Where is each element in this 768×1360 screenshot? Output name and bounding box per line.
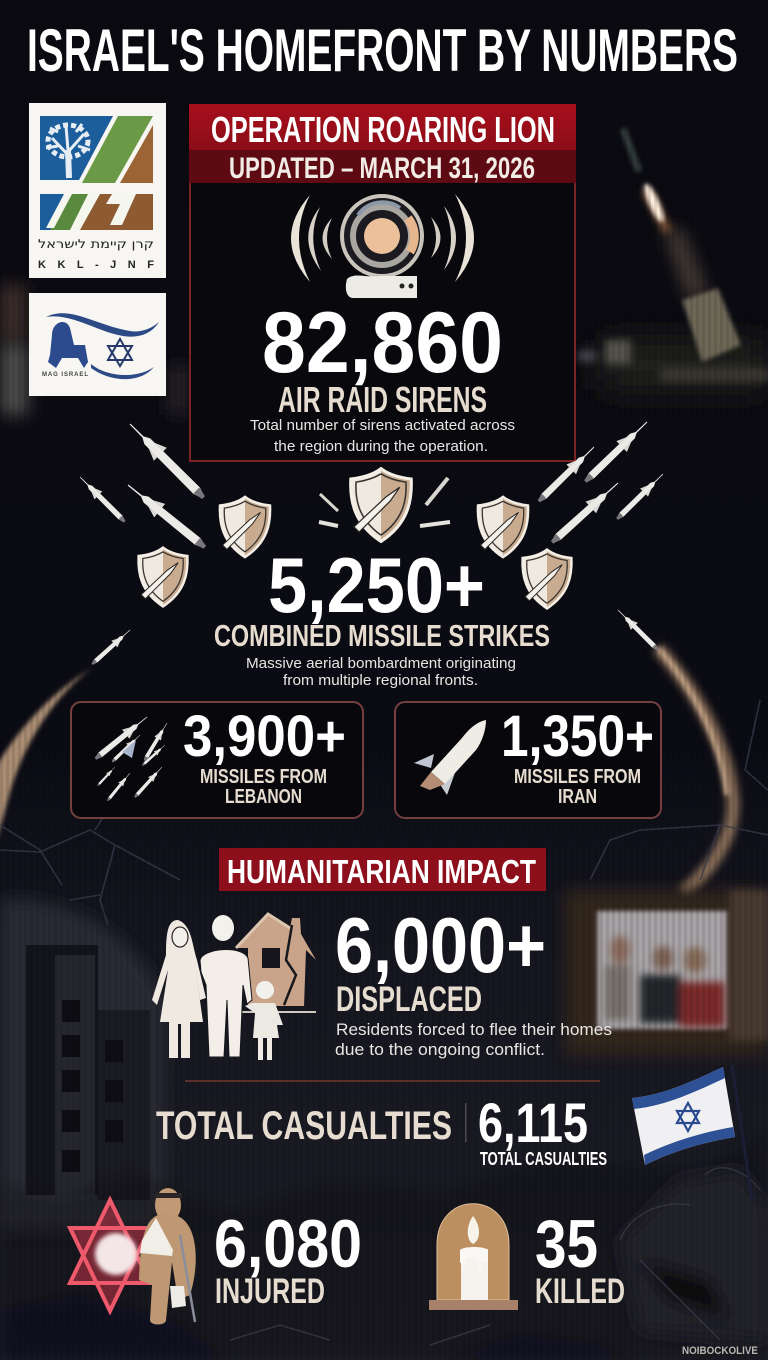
description xyxy=(250,417,515,455)
description xyxy=(335,1020,612,1059)
label: air raid sirens: AIR RAID SIRENS xyxy=(278,379,487,420)
description: Total number of sirens activated across xyxy=(250,417,515,434)
icon: memorial candle xyxy=(429,1204,518,1310)
figure: 3,900+ xyxy=(183,704,346,769)
label: MISSILES FROM xyxy=(200,766,327,788)
figure: siren count: 82,860 xyxy=(262,295,503,391)
icons: missile shields xyxy=(139,469,571,608)
label: displaced: DISPLACED xyxy=(336,980,482,1019)
icons: incoming missiles xyxy=(76,417,667,554)
banner: operation name: UPDATED – MARCH 31, 2026 xyxy=(229,152,535,185)
banner: operation name xyxy=(189,104,576,185)
icon: injured person xyxy=(139,1188,196,1324)
description: from multiple regional fronts. xyxy=(283,672,478,689)
watermark: NOIBOCKOLIVE xyxy=(682,1345,758,1357)
label xyxy=(200,766,327,808)
logo: lion and flag xyxy=(29,293,166,396)
icons: side missiles xyxy=(89,606,661,667)
icon: ballistic missile xyxy=(414,720,486,795)
card: missiles from Lebanon xyxy=(71,702,363,818)
figure: injured: 6,080 xyxy=(214,1206,362,1282)
background: rubble foreground xyxy=(0,1130,768,1360)
background: missile trails and cracks xyxy=(0,648,768,925)
icon: missile salvo xyxy=(92,712,170,803)
label xyxy=(514,766,641,808)
label: killed: KILLED xyxy=(535,1272,625,1311)
description: due to the ongoing conflict. xyxy=(335,1040,545,1059)
figure: killed: 35 xyxy=(535,1206,598,1282)
logo tile colours xyxy=(40,116,153,230)
figure: combined missile strikes: 5,250+ xyxy=(268,541,485,629)
figure: 1,350+ xyxy=(501,704,654,769)
label: combined missile strikes: COMBINED MISSILE STRIKES xyxy=(214,618,550,653)
background photo: sheltering family xyxy=(565,890,768,1055)
icon: star of David xyxy=(70,1200,150,1311)
description: the region during the operation. xyxy=(274,438,488,455)
icon: siren xyxy=(291,194,474,298)
background: ruined building xyxy=(0,899,165,1230)
logo Hebrew name: קרן קיימת לישראל xyxy=(38,237,154,251)
logo: KKL-JNF xyxy=(29,103,166,278)
label: total casualties: TOTAL CASUALTIES xyxy=(156,1104,452,1148)
label: LEBANON xyxy=(225,786,302,808)
card: missiles from Iran xyxy=(395,702,661,818)
description: Massive aerial bombardment originating xyxy=(246,655,516,672)
figure: total casualties: 6,115 xyxy=(478,1091,588,1154)
label: injured: INJURED xyxy=(215,1272,325,1311)
heading: humanitarian impact: HUMANITARIAN IMPACT xyxy=(227,853,536,890)
background scene: left night city xyxy=(0,285,188,415)
label: IRAN xyxy=(558,786,597,808)
icon: Israeli flag xyxy=(632,1065,752,1200)
divider xyxy=(185,1080,600,1082)
banner: operation name: OPERATION ROARING LION xyxy=(211,109,555,150)
icon: family and cracked house xyxy=(152,914,316,1060)
caption: total casualties: TOTAL CASUALTIES xyxy=(480,1149,607,1169)
separator xyxy=(465,1103,466,1142)
figure: displaced: 6,000+ xyxy=(335,901,546,989)
icon: tree xyxy=(46,124,90,178)
description: Residents forced to flee their homes xyxy=(336,1020,612,1039)
label: MISSILES FROM xyxy=(514,766,641,788)
background photo: interceptor launch xyxy=(578,127,768,390)
panel: air raid sirens xyxy=(189,104,576,461)
logo: lion and flag: MAG ISRAEL xyxy=(42,372,88,378)
description xyxy=(246,655,516,689)
logo Latin name: K K L - J N F xyxy=(38,259,154,271)
